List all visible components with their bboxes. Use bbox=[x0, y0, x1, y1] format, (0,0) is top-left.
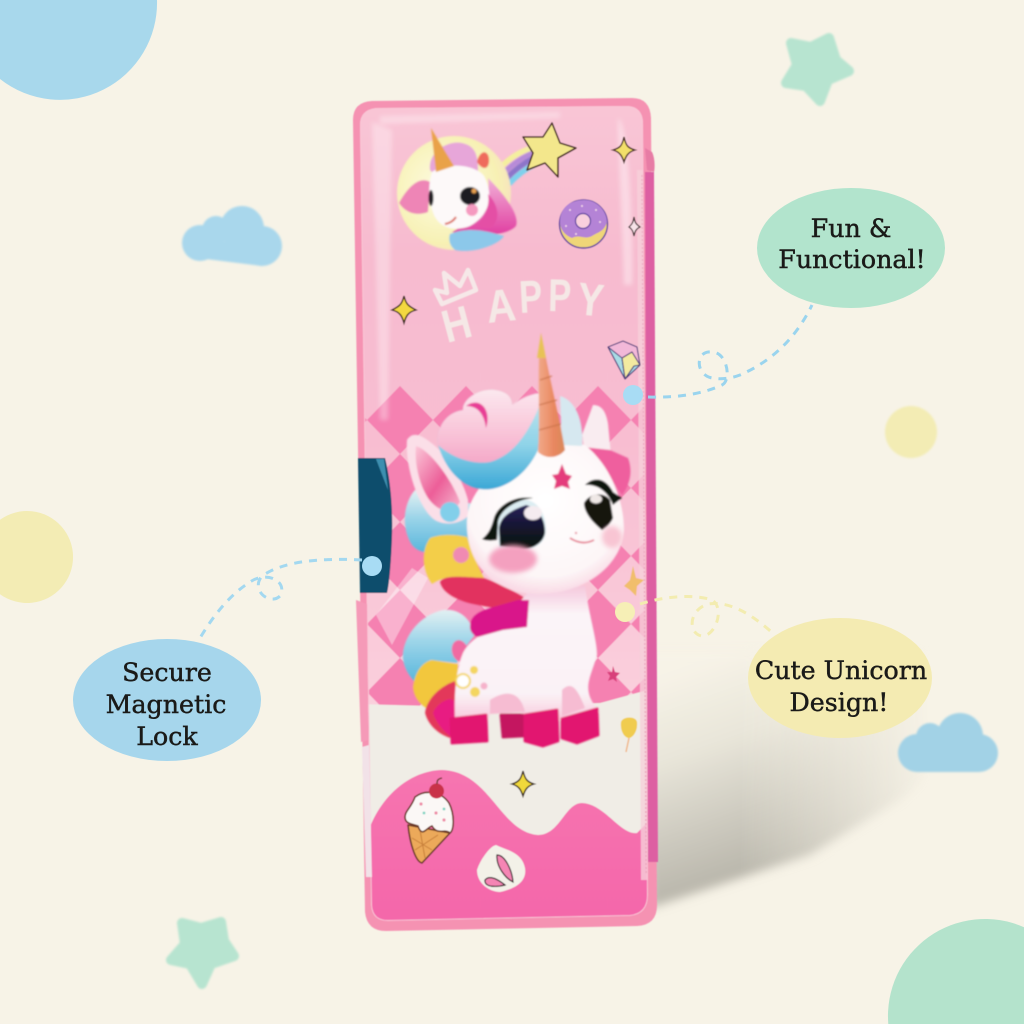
left lashes bbox=[482, 497, 533, 541]
mini mouth bbox=[445, 217, 456, 224]
mane right tuft bbox=[560, 396, 582, 446]
mini eye bbox=[460, 187, 480, 205]
clear tab lower-left bbox=[362, 745, 372, 877]
glossy highlights bbox=[372, 112, 632, 420]
mane curl bbox=[466, 403, 488, 428]
icon: gem bbox=[608, 341, 640, 379]
gem outline bbox=[608, 341, 640, 379]
moon circle bbox=[397, 136, 511, 250]
side zipper strip bbox=[645, 172, 658, 862]
callout: secure magnetic lock: Lock bbox=[136, 722, 198, 751]
circle: green bottom-right bbox=[888, 919, 1024, 1024]
ear bobble bbox=[440, 502, 460, 522]
mini left eye bbox=[428, 190, 434, 206]
mini face bbox=[429, 166, 489, 229]
circle: blue top-left bbox=[0, 0, 157, 100]
unicorn figure bbox=[403, 333, 630, 746]
happy lettering: H bbox=[436, 296, 477, 353]
donut hole bbox=[576, 214, 590, 228]
callout: secure magnetic lock bbox=[73, 556, 382, 761]
horn tip bbox=[537, 333, 546, 358]
case drop shadow bbox=[656, 694, 902, 911]
lock highlight bbox=[376, 459, 388, 490]
right ear spike bbox=[582, 405, 611, 455]
dot bbox=[615, 602, 635, 622]
happy lettering: A bbox=[484, 280, 518, 334]
icon: small pink star bbox=[607, 666, 620, 682]
mini mane top bbox=[430, 142, 478, 178]
inner rim bbox=[360, 106, 648, 921]
sprinkles bbox=[419, 802, 446, 822]
case outer shell bbox=[353, 98, 657, 931]
mane pink top bbox=[438, 390, 542, 463]
hip flower bbox=[455, 666, 488, 697]
bubble blue bbox=[73, 639, 261, 761]
mini left tuft bbox=[399, 180, 430, 214]
icon: small sparkle bbox=[629, 217, 640, 236]
icon: sparkle left bbox=[392, 296, 416, 323]
icon: donut bbox=[560, 200, 608, 248]
right eye bbox=[584, 494, 613, 530]
pink wave bottom bbox=[370, 770, 648, 920]
right eye shine bbox=[590, 494, 602, 504]
happy lettering: Y bbox=[575, 273, 606, 327]
sprinkles teal bbox=[423, 808, 445, 814]
seam stitching bbox=[643, 175, 647, 875]
donut base bbox=[560, 200, 608, 248]
yellow mane bobble bbox=[453, 547, 469, 563]
callout: fun and functional bbox=[623, 188, 945, 405]
icon: ice cream bbox=[405, 778, 453, 863]
right cheek bbox=[602, 526, 622, 548]
circle: yellow left bbox=[0, 511, 73, 603]
sticker: unicorn in circle bbox=[397, 128, 535, 251]
happy lettering: P bbox=[548, 269, 572, 322]
upper pale pink section bbox=[355, 100, 655, 712]
left eye rim bbox=[497, 500, 546, 550]
leader line yellow bbox=[640, 597, 775, 636]
callout: secure magnetic lock: Magnetic bbox=[106, 690, 226, 719]
diamond checker pattern bbox=[355, 386, 655, 711]
yellow mane bbox=[424, 535, 484, 584]
patch bbox=[477, 845, 525, 892]
icon: sparkle top-right bbox=[613, 137, 635, 162]
cloud: blue upper-left bbox=[182, 206, 282, 266]
star: green top-right bbox=[786, 38, 849, 101]
happy lettering: P bbox=[518, 270, 544, 323]
left eye shine bbox=[524, 506, 542, 520]
mini wing bbox=[449, 230, 504, 251]
gem right facet bbox=[625, 365, 640, 379]
right lashes bbox=[585, 480, 622, 505]
mini heart ear bbox=[477, 152, 489, 168]
bubble text: Fun & bbox=[811, 214, 891, 243]
tail magenta bbox=[433, 699, 462, 736]
cherry bbox=[429, 784, 444, 798]
horn rings bbox=[539, 376, 561, 430]
dot blue bbox=[362, 556, 382, 576]
cone bbox=[408, 825, 450, 863]
window glare bbox=[376, 568, 428, 645]
bubble text: Cute Unicorn bbox=[755, 656, 927, 685]
left eye bbox=[499, 505, 545, 549]
icon: white patch with ears bbox=[477, 845, 525, 892]
star: green bottom-left bbox=[171, 922, 234, 984]
icon: popsicle bbox=[621, 718, 637, 752]
head bbox=[467, 443, 624, 594]
callout: fun and functional: Functional! bbox=[778, 245, 926, 274]
gem left facet bbox=[608, 347, 625, 379]
nostril bbox=[575, 532, 577, 534]
gem centre facet bbox=[622, 352, 640, 379]
donut sprinkles bbox=[565, 205, 601, 235]
donut icing bbox=[560, 200, 607, 238]
magnetic lock tab bbox=[358, 458, 392, 593]
rainbow trail bbox=[500, 148, 535, 184]
inner right seam bbox=[637, 170, 648, 881]
tail red bbox=[425, 680, 462, 738]
left cheek bbox=[489, 545, 537, 573]
popsicle top bbox=[621, 718, 637, 738]
leader line green-blue bbox=[648, 305, 812, 397]
tail yellow bbox=[413, 660, 458, 712]
callout: cute unicorn design bbox=[615, 597, 932, 738]
ear shapes bbox=[497, 855, 513, 882]
mini horn bbox=[431, 128, 454, 172]
horn bbox=[538, 333, 565, 457]
forehead star bbox=[552, 464, 572, 489]
bubble green bbox=[757, 188, 945, 308]
red mane bbox=[440, 577, 528, 612]
left ear bbox=[407, 435, 468, 523]
mini cheek bbox=[466, 204, 478, 216]
smile bbox=[570, 538, 594, 543]
bubble yellow bbox=[748, 618, 932, 738]
happy lettering bbox=[436, 269, 606, 353]
popsicle stick bbox=[626, 738, 629, 752]
belly shading bbox=[490, 686, 585, 716]
icon: sparkle bottom bbox=[512, 771, 534, 796]
cone waffle bbox=[412, 830, 438, 858]
callout: cute unicorn design: Design! bbox=[790, 688, 888, 717]
blue back mane bbox=[405, 490, 478, 552]
side clip bbox=[645, 148, 655, 172]
cloud: blue lower-right bbox=[898, 713, 998, 772]
left ear inner bbox=[416, 446, 460, 511]
mane blue sweep bbox=[438, 390, 542, 489]
tail blue bbox=[403, 610, 474, 682]
circle: yellow right bbox=[885, 406, 937, 458]
crown doodle bbox=[435, 270, 476, 304]
leader line blue bbox=[200, 559, 362, 638]
product: unicorn pencil case bbox=[353, 98, 658, 931]
lock strap left bbox=[356, 600, 368, 742]
bubble text: Secure bbox=[122, 658, 212, 687]
white frosting band bbox=[368, 691, 646, 836]
mini mane lower bbox=[452, 178, 517, 235]
icon: small gold star bbox=[624, 566, 644, 596]
body bbox=[455, 586, 600, 724]
cherry stem bbox=[437, 778, 442, 784]
case front face bbox=[355, 100, 655, 930]
icon: yellow star bbox=[523, 123, 576, 177]
tail pink bobble bbox=[449, 638, 471, 664]
mini magenta cheek fur bbox=[476, 194, 497, 228]
right ear patch bbox=[583, 447, 630, 495]
scoop bbox=[405, 792, 453, 833]
dot bbox=[623, 385, 643, 405]
magenta curl bbox=[470, 600, 529, 637]
hooves bbox=[451, 709, 598, 746]
